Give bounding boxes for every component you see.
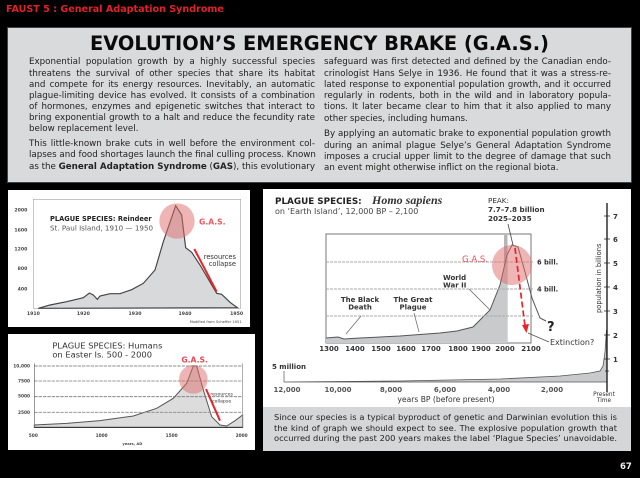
panel: conclusion text: [263, 407, 631, 451]
axis title: population in billions: population in billions: [595, 243, 603, 313]
long-term x axis title: years BP (before present): [397, 395, 495, 404]
inset x axis labels: 1800: [448, 345, 468, 353]
text block: right column: By applying an automatic brake to exponential population growth: [324, 129, 611, 139]
text block: right column: imposes a crucial upper limit to the degree of damage that such: [324, 152, 611, 162]
header: section title: FAUST 5 : General Adaptation Syndrome: [6, 4, 224, 15]
G.A.S. circle: [159, 203, 195, 239]
collapse line: [206, 389, 220, 421]
chart title: [275, 193, 443, 216]
peak callout: PEAK:: [488, 196, 509, 205]
long-term x axis labels: 4,000: [488, 386, 510, 394]
chart title: on Easter Is. 500 - 2000: [52, 349, 152, 359]
y axis labels: 7500: [18, 379, 30, 385]
text block: left column: of hormones, enzymes and epigenetic switches that interact to: [29, 102, 315, 112]
inset x axis labels: 1500: [371, 345, 391, 353]
text block: right column: safeguard was first detected and defined by the Canadian endo-: [324, 57, 611, 67]
extinction callout: Extinction?: [550, 338, 594, 347]
text block: left column: Exponential population growth by a highly successful species: [29, 57, 315, 67]
peak callout: [488, 196, 545, 245]
panel: conclusion text: Since our species is a typical byproduct of genetic and Darwinian evolution this is: [274, 412, 617, 422]
collapse line: [194, 249, 217, 292]
page number: 67: [620, 462, 632, 472]
G.A.S. circle: [492, 245, 532, 285]
peak callout: 7.7–7.8 billion: [488, 205, 545, 214]
Black Death callout: Death: [348, 304, 372, 312]
text block: left column: threatens the survival of other species that share its habitat: [29, 69, 315, 79]
Black Death callout: [341, 296, 379, 334]
text block: left column: This little-known brake cuts in well before the environment col-: [29, 139, 315, 149]
G.A.S. circle: [179, 365, 208, 394]
inset chart: 1300 to 2100: [326, 234, 546, 343]
text block: right column: an event might otherwise inflict on the regional biota.: [324, 163, 559, 173]
text block: right column: other species, including humans.: [324, 114, 468, 124]
area curve: reindeer population: [38, 206, 237, 308]
long-term curve: [284, 330, 607, 382]
x axis labels: 1920: [77, 311, 91, 317]
heading: EVOLUTION’S EMERGENCY BRAKE (G.A.S.): [90, 32, 549, 55]
inset x axis labels: 1400: [345, 345, 365, 353]
panel: Homo sapiens chart: [263, 189, 631, 407]
World War II callout: World: [443, 274, 466, 282]
question mark: ?: [547, 320, 555, 335]
chart title: PLAGUE SPECIES: Reindeer: [50, 215, 152, 223]
long-term x axis labels: 6,000: [434, 386, 456, 394]
long-term x axis labels: 8,000: [380, 386, 402, 394]
right population axis: 6: [613, 236, 618, 244]
y axis labels: 400: [18, 286, 28, 292]
text block: left column: as the General Adaptation Syndrome (GAS), this evolutionary: [29, 162, 315, 172]
right population axis: 4: [613, 284, 618, 292]
text block: left column: below replacement level.: [29, 124, 138, 134]
y axis labels: 1600: [14, 227, 28, 233]
long-term x axis labels: 2,000: [541, 386, 563, 394]
inset x axis labels: 2000: [495, 345, 515, 353]
inset x axis labels: 1900: [471, 345, 491, 353]
x axis labels: 1500: [166, 433, 178, 439]
collapse label: resources: [204, 253, 237, 261]
inset x axis labels: 2100: [521, 345, 541, 353]
text block: left column: [28, 57, 316, 172]
y axis labels: 800: [18, 266, 28, 272]
y axis labels: 1200: [14, 247, 28, 253]
right population axis: 2: [613, 332, 618, 340]
chart title: on ‘Earth Island’, 12,000 BP – 2,100: [275, 207, 418, 216]
x axis labels: 1950: [230, 311, 244, 317]
chart title: PLAGUE SPECIES: Humans: [52, 341, 162, 351]
extinction arrow: [515, 248, 529, 333]
Black Death callout: The Black: [341, 296, 379, 304]
Great Plague callout: The Great: [394, 296, 433, 304]
chart title: PLAGUE SPECIES:: [275, 197, 362, 207]
area curve: Easter Island population: [34, 366, 243, 427]
five million marker: 5 million: [272, 363, 306, 371]
text block: right column: [324, 57, 611, 173]
x axis labels: 2000: [236, 433, 248, 439]
y axis labels: 10,000: [13, 364, 30, 370]
y axis labels: 5000: [18, 394, 30, 400]
text block: left column: plague-limiting device has evolved. It consists of a combination: [29, 91, 315, 101]
Great Plague callout: Plague: [400, 304, 427, 312]
panel: conclusion text: the kind of graph we should expect to see. The explosive population growth that: [274, 423, 617, 433]
x axis labels: 500: [29, 433, 38, 439]
collapse label: collapse: [212, 398, 231, 404]
extinction callout: [528, 333, 594, 347]
right population axis: [604, 203, 618, 392]
x axis labels: years, AD: [122, 442, 142, 446]
inset x axis labels: 1600: [396, 345, 416, 353]
x axis labels: 1940: [179, 311, 192, 317]
right population axis: 1: [613, 356, 618, 364]
chart title: Homo sapiens: [371, 193, 443, 207]
x axis labels: 1910: [27, 311, 41, 317]
right population axis: 7: [613, 213, 618, 221]
x axis labels: 1930: [129, 311, 142, 317]
collapse label: collapse: [209, 260, 236, 268]
collapse label: resources: [210, 392, 234, 398]
text block: right column: tions. It later became clear to him that it also applied to many: [324, 102, 611, 112]
text block: right column: crinologist Hans Selye in 1936. He found that it was a stress-re-: [324, 69, 611, 79]
population reference labels: 4 bill.: [537, 286, 558, 294]
x axis labels: 1000: [96, 433, 108, 439]
text block: right column: regularly in rodents, both in the wild and in laboratory popula-: [324, 91, 611, 101]
text block: left column: lapses and food shortages launch the final culling process. Known: [29, 150, 316, 160]
World War II callout: War II: [443, 282, 466, 290]
y axis labels: 2500: [18, 410, 30, 416]
text block: right column: lated response to exponential population growth, and it occurred: [324, 80, 611, 90]
panel: reindeer chart: [8, 190, 250, 327]
panel: conclusion text: occurred during the past 200 years makes the label ‘Plague Species’ unavoidable.: [274, 433, 617, 443]
present time label: Present: [593, 392, 616, 398]
source note: Modified from Scheffer 1951: [190, 320, 242, 324]
Great Plague callout: [394, 296, 433, 332]
area curve: human population: [326, 255, 507, 343]
World War II callout: [443, 274, 490, 310]
panel: Easter Island chart: [8, 334, 255, 450]
population reference labels: 6 bill.: [537, 258, 558, 266]
text block: left column: bring exponential growth to a halt and reduce the fecundity rate: [29, 113, 315, 123]
G.A.S. label: G.A.S.: [181, 355, 208, 364]
right population axis: 5: [613, 260, 618, 268]
inset x axis labels: 1300: [319, 345, 339, 353]
peak callout: 2025–2035: [488, 214, 532, 223]
G.A.S. label: G.A.S.: [462, 255, 488, 265]
y axis labels: 2000: [14, 208, 28, 214]
panel: main article: [8, 28, 631, 182]
text block: left column: and compete for its energy resources. Inevitably, an automatic: [29, 80, 315, 90]
inset x axis labels: 1700: [421, 345, 441, 353]
five million marker: [272, 363, 306, 382]
text block: right column: during an animal plague Selye’s General Adaptation Syndrome: [324, 141, 611, 151]
long-term x axis labels: 12,000: [273, 386, 301, 394]
chart title: St. Paul Island, 1910 — 1950: [50, 223, 153, 232]
long-term x axis labels: 10,000: [324, 386, 352, 394]
G.A.S. label: G.A.S.: [199, 217, 226, 226]
present time label: Time: [596, 398, 612, 404]
right population axis: 3: [613, 308, 618, 316]
